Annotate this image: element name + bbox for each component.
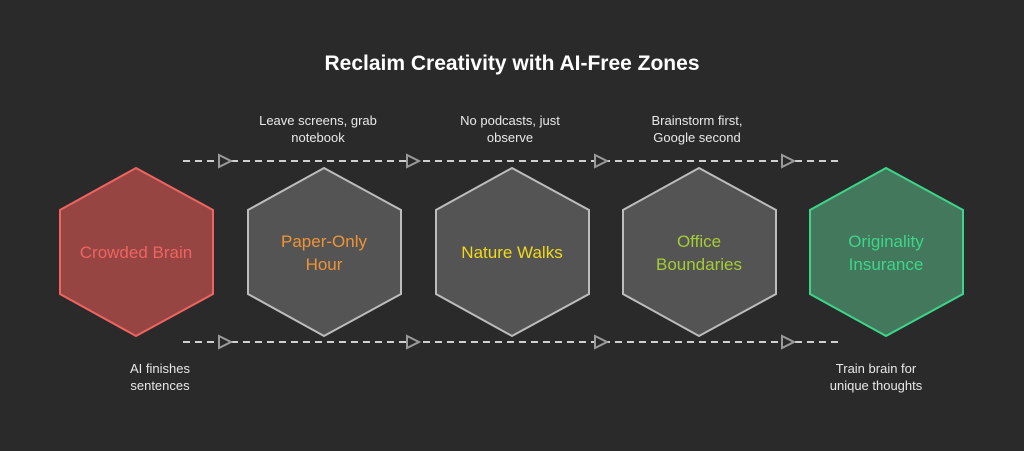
hexagon: Crowded Brain: Crowded Brain xyxy=(80,243,192,262)
label: crowded brain: AI finishes xyxy=(130,361,190,376)
label: originality xyxy=(830,361,923,393)
label: office boundaries: Google second xyxy=(653,130,741,145)
hexagon: Office Boundaries: Office xyxy=(677,232,721,251)
label: paper-only: Leave screens, grab xyxy=(259,113,377,128)
hexagon: Paper-Only Hour: Hour xyxy=(306,255,343,274)
label: office boundaries: Brainstorm first, xyxy=(651,113,743,128)
hexagon: Paper-Only Hour xyxy=(248,168,401,336)
label: originality: unique thoughts xyxy=(830,378,923,393)
label: paper-only: notebook xyxy=(291,130,345,145)
top dashed arrow line xyxy=(183,155,840,167)
label: nature walks xyxy=(460,113,560,145)
hexagon: Crowded Brain xyxy=(60,168,213,336)
bottom dashed arrow line xyxy=(183,336,840,348)
hexagon: Office Boundaries: Boundaries xyxy=(656,255,742,274)
label: paper-only xyxy=(259,113,377,145)
label: nature walks: observe xyxy=(487,130,533,145)
hexagon: Originality Insurance: Originality xyxy=(848,232,924,251)
hexagon: Nature Walks xyxy=(436,168,589,336)
label: crowded brain: sentences xyxy=(130,378,190,393)
title: Reclaim Creativity with AI-Free Zones xyxy=(324,52,700,75)
label: crowded brain xyxy=(130,361,190,393)
hexagon: Originality Insurance: Insurance xyxy=(849,255,923,274)
label: office boundaries xyxy=(651,113,743,145)
hexagon: Nature Walks: Nature Walks xyxy=(461,243,563,262)
label: originality: Train brain for xyxy=(836,361,917,376)
hexagon: Originality Insurance xyxy=(810,168,963,336)
label: nature walks: No podcasts, just xyxy=(460,113,560,128)
hexagon: Office Boundaries xyxy=(623,168,776,336)
hexagon: Paper-Only Hour: Paper-Only xyxy=(281,232,367,251)
